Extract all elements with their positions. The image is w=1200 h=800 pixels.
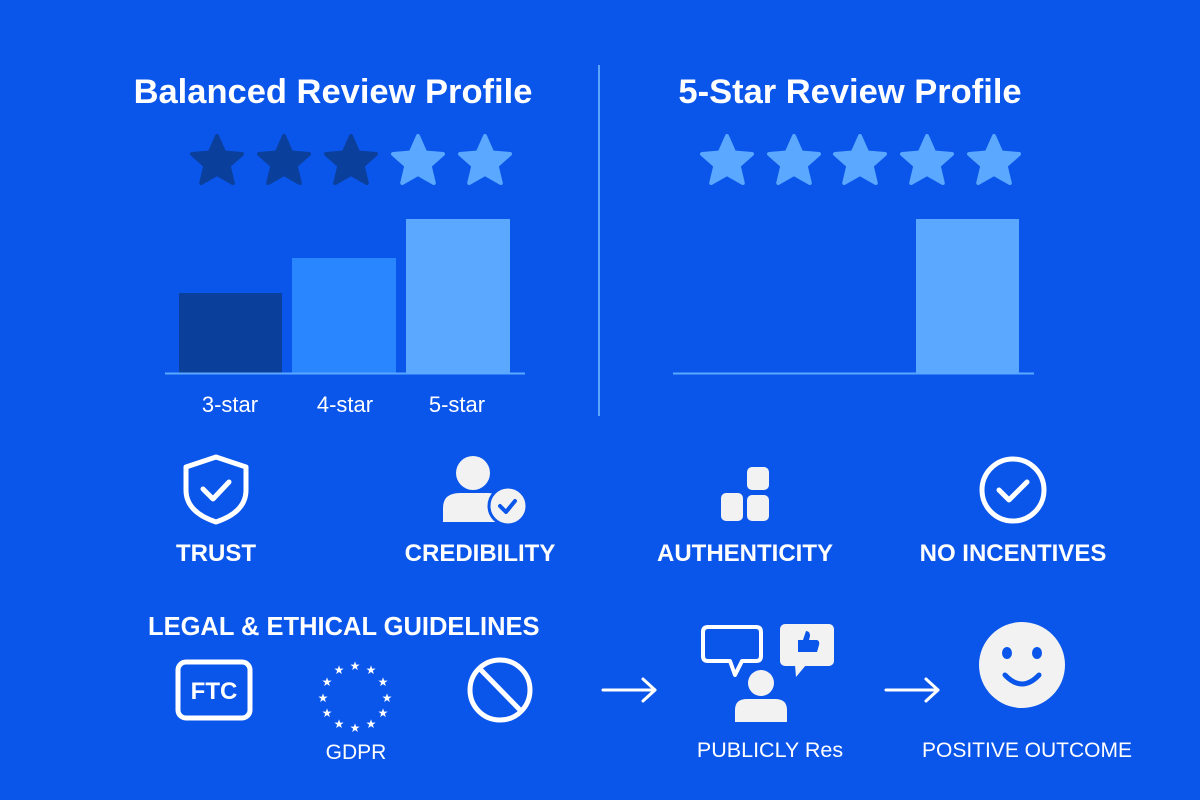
label: credibility: CREDIBILITY	[405, 540, 555, 567]
icon: GDPR stars	[318, 659, 392, 735]
icon: FTC: FTC	[191, 678, 237, 705]
icon: GDPR stars: ★	[318, 691, 328, 705]
bar chart: balanced: 5-star	[429, 392, 485, 417]
icon: GDPR stars: ★	[322, 675, 332, 689]
arrow 1	[603, 679, 655, 701]
heading: legal & ethical guidelines: LEGAL & ETHICAL GUIDELINES	[148, 613, 540, 641]
icon: GDPR stars: ★	[378, 706, 388, 720]
bar chart: 5-star	[673, 219, 1034, 374]
icon: GDPR stars: ★	[366, 663, 376, 677]
icon: GDPR stars: ★	[350, 659, 360, 673]
icon: GDPR stars: ★	[366, 717, 376, 731]
label: trust: TRUST	[176, 540, 256, 567]
title: balanced review profile: Balanced Review Profile	[134, 73, 532, 111]
icon: prohibited	[470, 660, 530, 720]
label: no incentives: NO INCENTIVES	[920, 540, 1106, 567]
icon: GDPR stars: ★	[334, 717, 344, 731]
bar chart: balanced	[165, 219, 525, 417]
icon: GDPR stars: ★	[350, 721, 360, 735]
stars: 5-star	[702, 136, 1019, 183]
icon: smiley	[979, 622, 1065, 708]
title: 5-star review profile: 5-Star Review Profile	[678, 73, 1022, 111]
label: authenticity: AUTHENTICITY	[657, 540, 833, 567]
icon: GDPR stars: ★	[334, 663, 344, 677]
label: positive outcome: POSITIVE OUTCOME	[922, 739, 1132, 762]
icon: credibility	[443, 456, 527, 525]
icon: authenticity blocks	[721, 467, 769, 521]
label: publicly res: PUBLICLY Res	[697, 738, 843, 762]
arrow 2	[886, 679, 938, 701]
icon: FTC	[178, 662, 250, 718]
bar chart: balanced: 3-star	[202, 392, 258, 417]
label: GDPR: GDPR	[326, 741, 386, 764]
bar chart: balanced: 4-star	[317, 392, 373, 417]
icon: public response	[703, 624, 834, 722]
stars: balanced	[192, 136, 510, 183]
icon: trust shield	[186, 457, 246, 522]
icon: GDPR stars: ★	[378, 675, 388, 689]
icon: no incentives check circle	[982, 459, 1044, 521]
icon: GDPR stars: ★	[322, 706, 332, 720]
icon: GDPR stars: ★	[382, 691, 392, 705]
